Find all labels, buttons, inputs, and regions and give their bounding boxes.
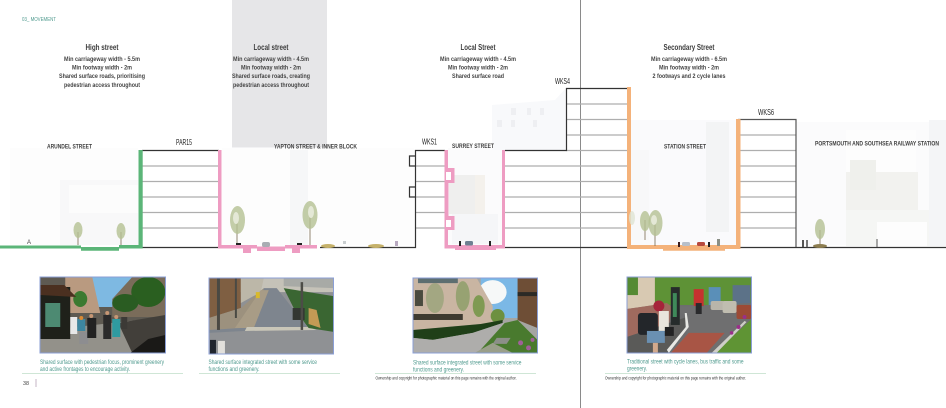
- pink street section line, Yapton: [218, 150, 317, 253]
- heading: local street, Surrey: Min footway width - 2m: [448, 64, 508, 72]
- caption 2: Shared surface integrated street with some service: [208, 359, 317, 366]
- photo border 4: [627, 277, 752, 353]
- caption 4: [627, 358, 744, 372]
- page number: [23, 379, 36, 387]
- heading: high street: [59, 43, 145, 89]
- street and building labels: PAR15: [176, 138, 192, 147]
- street and building labels: YAPTON STREET & INNER BLOCK: [274, 144, 357, 150]
- heading: local street, Yapton: Min footway width - 2m: [241, 64, 301, 72]
- street and building labels: STATION STREET: [664, 144, 706, 150]
- caption 1: [40, 359, 165, 373]
- page divider: [580, 0, 582, 408]
- heading: local street, Yapton: pedestrian access throughout: [233, 82, 310, 89]
- heading: local street, Yapton: [232, 43, 310, 89]
- heading: high street: pedestrian access throughout: [64, 82, 141, 89]
- photo: shared surface street: [210, 278, 333, 354]
- heading: local street, Surrey: [440, 43, 516, 80]
- green high street section line: [0, 150, 143, 251]
- heading: high street: High street: [86, 43, 119, 52]
- heading: local street, Yapton: Min carriageway width - 4.5m: [233, 56, 309, 63]
- section label: 03_ MOVEMENT: [22, 17, 56, 23]
- pink street section line, Surrey: [444, 150, 505, 250]
- copyright note left: Ownership and copyright for photographic material on this page remains with the original author.: [376, 376, 516, 380]
- photo: pedestrian high street: [40, 278, 165, 352]
- street and building labels: WKS6: [758, 108, 774, 117]
- street and building labels: A: [27, 240, 31, 246]
- photo border 2: [209, 278, 334, 354]
- street and building labels: WKS1: [422, 138, 437, 146]
- heading: secondary street: Secondary Street: [664, 43, 715, 52]
- heading: secondary street: [651, 43, 727, 80]
- building PAR15: [142, 150, 219, 248]
- heading: high street: Min footway width - 2m: [72, 64, 132, 72]
- heading: secondary street: 2 footways and 2 cycle lanes: [652, 73, 726, 80]
- caption 3: functions and greenery.: [413, 366, 464, 374]
- caption 3: Shared surface integrated street with some service: [413, 360, 522, 366]
- photo border 3: [413, 278, 538, 353]
- orange street section line: [627, 87, 740, 251]
- heading: local street, Surrey: Local Street: [460, 43, 496, 52]
- photo: shared surface with hedges: [414, 278, 537, 352]
- street and building labels: [27, 77, 939, 246]
- caption 2: functions and greenery.: [208, 366, 260, 373]
- ghosted context buildings: [10, 88, 946, 246]
- people, cars and planting: [236, 239, 827, 248]
- heading: local street, Yapton: Local street: [254, 43, 289, 52]
- building WKS4: [505, 88, 628, 248]
- heading: high street: Shared surface roads, prioritising: [59, 73, 145, 80]
- photo: cycle lanes street: [628, 278, 751, 352]
- street and building labels: ARUNDEL STREET: [47, 144, 92, 150]
- caption 4: Traditional street with cycle lanes, bus traffic and some: [627, 358, 744, 366]
- building WKS1: [320, 150, 445, 248]
- page number: 38: [23, 381, 29, 387]
- caption 2: [208, 359, 317, 373]
- heading: high street: Min carriageway width - 5.5m: [64, 56, 140, 63]
- heading: secondary street: Min carriageway width - 6.5m: [651, 56, 727, 63]
- street and building labels: WKS4: [555, 77, 570, 86]
- heading: secondary street: Min footway width - 2m: [659, 64, 719, 72]
- heading: local street, Surrey: Min carriageway width - 4.5m: [440, 56, 516, 63]
- building WKS6: [738, 120, 946, 248]
- caption 4: greenery.: [627, 366, 647, 372]
- caption 1: Shared surface with pedestrian focus, prominent greenery: [40, 359, 165, 366]
- caption 1: and active frontages to encourage activity.: [40, 366, 130, 373]
- photo border 1: [40, 277, 166, 353]
- grey highlight panel behind local street: [232, 0, 327, 148]
- copyright note right: Ownership and copyright for photographic material on this page remains with the original author.: [605, 376, 746, 380]
- street and building labels: SURREY STREET: [452, 143, 494, 150]
- trees: [74, 201, 825, 246]
- heading: local street, Yapton: Shared surface roads, creating: [232, 73, 310, 80]
- heading: local street, Surrey: Shared surface road: [452, 73, 504, 80]
- caption 3: [413, 360, 522, 374]
